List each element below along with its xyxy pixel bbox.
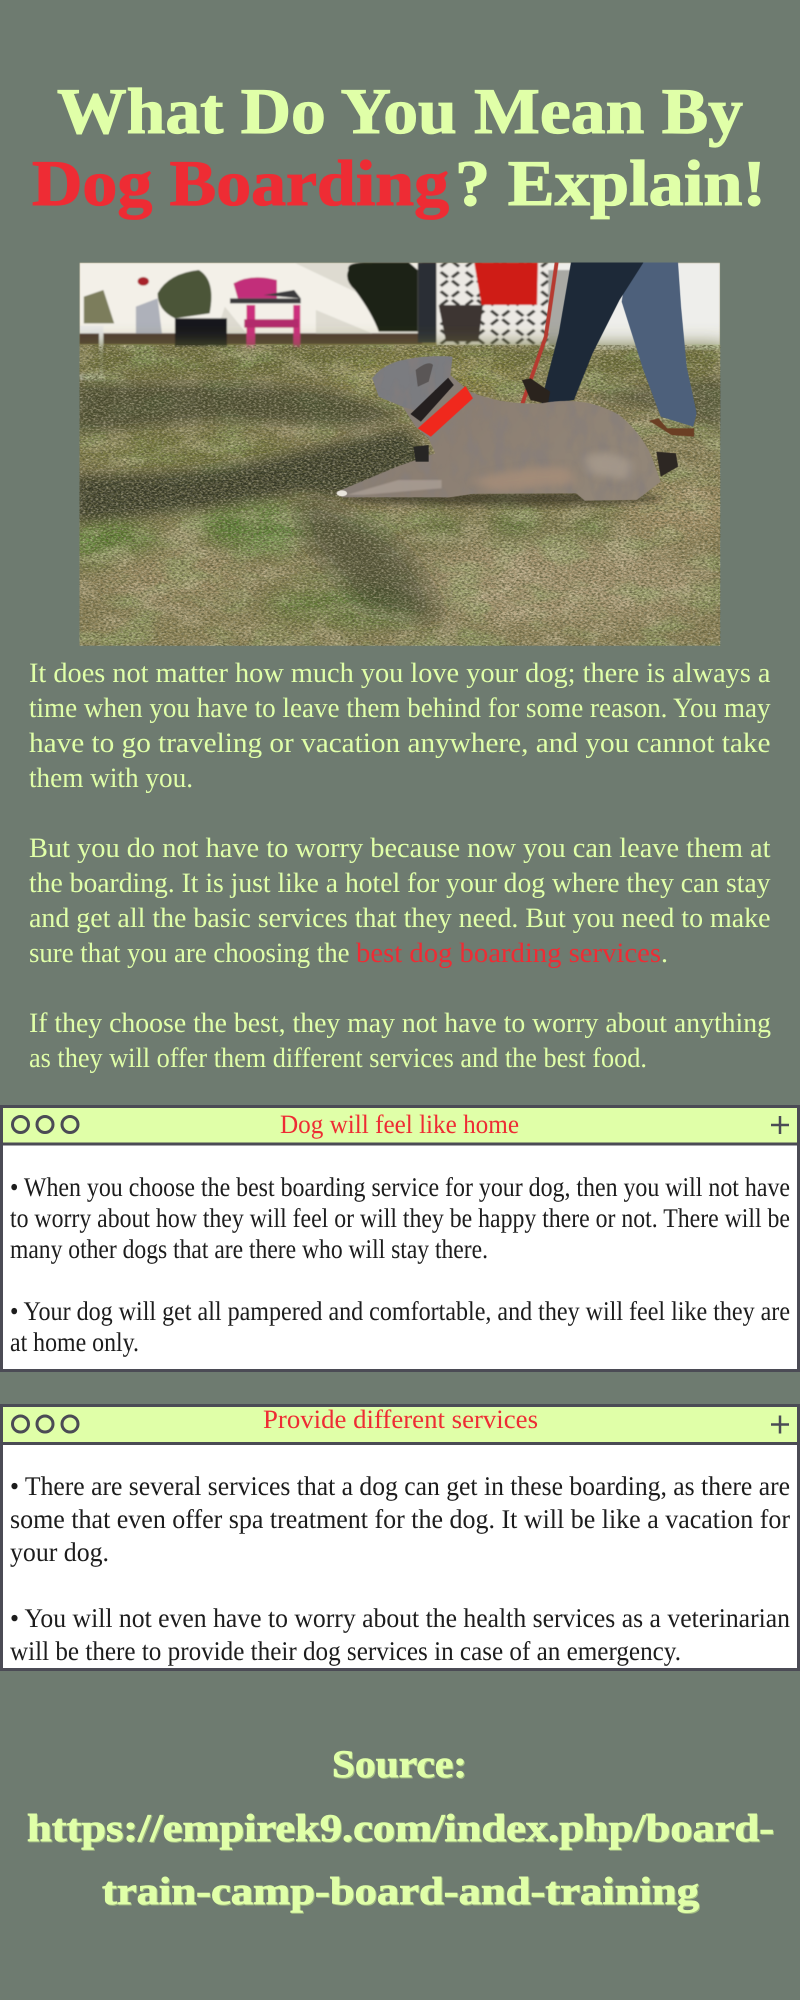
panel text: some that even offer spa treatment for the dog. It will be like a vacation for bbox=[10, 1504, 790, 1534]
panel text: at home only. bbox=[10, 1327, 139, 1357]
planter and plant bbox=[158, 270, 211, 318]
intro text: If they choose the best, they may not have to worry about anything bbox=[29, 1008, 771, 1039]
panel text bbox=[10, 1172, 790, 1357]
intro text: them with you. bbox=[29, 763, 193, 794]
grass texture bbox=[80, 345, 720, 646]
source: train-camp-board-and-training bbox=[102, 1870, 700, 1913]
panel header: Dog will feel like home bbox=[280, 1109, 519, 1139]
panel header bbox=[2, 1106, 798, 1144]
leash bbox=[522, 263, 557, 405]
intro text: have to go traveling or vacation anywhere, and you cannot take bbox=[29, 728, 770, 759]
panel text bbox=[10, 1471, 790, 1666]
intro text: sure that you are choosing the bbox=[29, 938, 350, 969]
intro text: But you do not have to worry because now you can leave them at bbox=[29, 833, 771, 864]
panel: dog will feel like home bbox=[2, 1106, 798, 1370]
large-scale grass variation bbox=[80, 345, 720, 646]
title bbox=[32, 76, 766, 220]
source: https://empirek9.com/index.php/board- bbox=[27, 1807, 774, 1850]
intro text: as they will offer them different services and the best food. bbox=[29, 1043, 647, 1074]
intro text: . bbox=[661, 938, 668, 969]
source bbox=[27, 1743, 774, 1913]
intro text bbox=[29, 658, 771, 1074]
grass patches bbox=[64, 347, 737, 643]
panel text: will be there to provide their dog services in case of an emergency. bbox=[10, 1636, 681, 1666]
bush bbox=[347, 263, 418, 332]
intro text: and get all the basic services that they need. But you need to make bbox=[29, 903, 770, 934]
dog bbox=[333, 353, 678, 506]
title: ? Explain! bbox=[455, 148, 766, 220]
panel text: your dog. bbox=[10, 1537, 109, 1567]
tree shadows on grass bbox=[73, 377, 728, 522]
red shirt and pot bbox=[474, 263, 538, 305]
panel text: many other dogs that are there who will stay there. bbox=[10, 1234, 488, 1264]
intro text: time when you have to leave them behind for some reason. You may bbox=[29, 693, 770, 724]
panel header bbox=[2, 1404, 798, 1444]
pink chair bbox=[233, 277, 277, 298]
title: What Do You Mean By bbox=[57, 76, 743, 148]
photo: dog lying on grass in a yard bbox=[64, 263, 737, 646]
panel header: Provide different services bbox=[263, 1404, 538, 1434]
intro text: best dog boarding services bbox=[356, 938, 661, 969]
title: Dog Boarding bbox=[32, 148, 449, 220]
panel: provide different services bbox=[2, 1404, 798, 1670]
wall and yard background bbox=[80, 263, 720, 380]
intro text: the boarding. It is just like a hotel for your dog where they can stay bbox=[29, 868, 770, 899]
handler legs bbox=[522, 263, 697, 437]
source: Source: bbox=[332, 1743, 467, 1786]
intro text: It does not matter how much you love your dog; there is always a bbox=[29, 658, 771, 689]
